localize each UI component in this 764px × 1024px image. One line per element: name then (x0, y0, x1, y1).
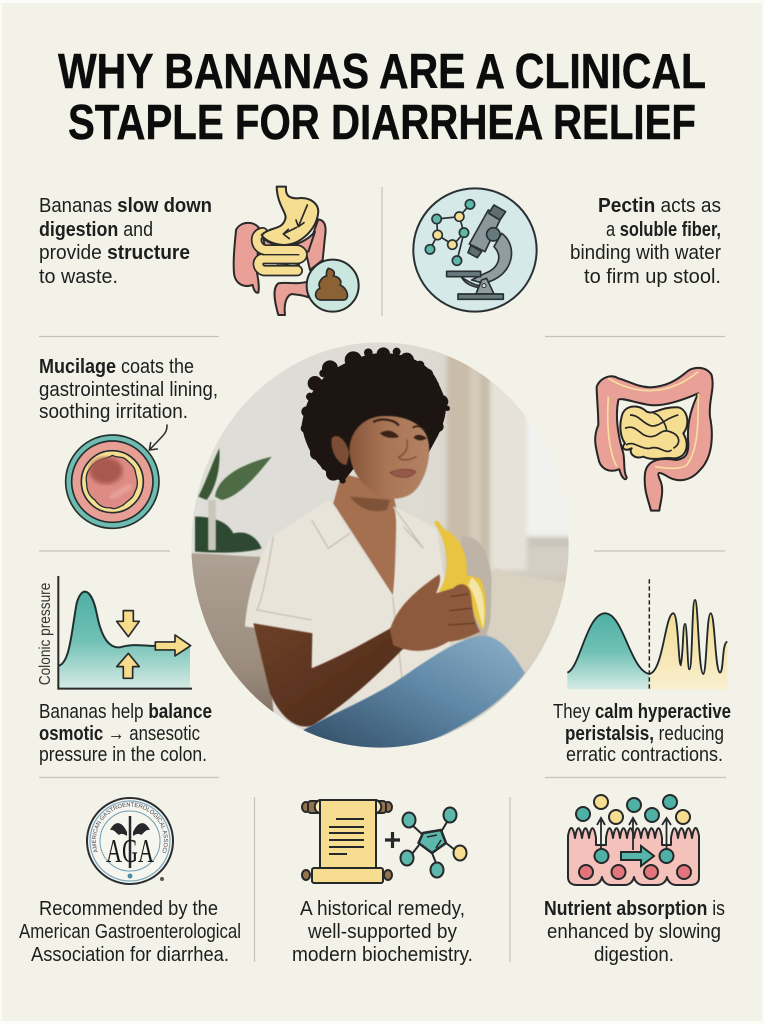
text: historical remedy: A historical remedy, (300, 897, 465, 920)
icon: intestinal cross-section (66, 425, 167, 528)
text: mucilage: soothing irritation. (39, 400, 188, 423)
facial features (374, 419, 426, 478)
icon: digestive tract with stool (234, 187, 359, 315)
text: nutrient absorption: enhanced by slowing (547, 920, 721, 943)
text: pectin: a soluble fiber, (606, 218, 721, 241)
banana (434, 521, 486, 630)
forearm (253, 623, 407, 727)
sofa (192, 537, 565, 712)
text: peristalsis: peristalsis, reducing (565, 722, 724, 745)
face (349, 416, 429, 499)
text: AGA recommendation: Association for diarrhea. (31, 943, 229, 966)
text: peristalsis: erratic contractions. (566, 743, 723, 766)
icon: AGA seal: AMERICAN GASTROENTEROLOGICAL ASSOCIATION (92, 802, 168, 854)
text: slow down digestion: provide structure (39, 241, 190, 264)
text: AGA recommendation: American Gastroenterological (19, 920, 241, 943)
hair (301, 347, 450, 484)
text: pectin (570, 194, 721, 288)
icon: nutrient absorption in villi (568, 795, 699, 885)
jeans (303, 636, 525, 753)
text: slow down digestion: digestion and (39, 218, 153, 241)
chart: colonic pressure (37, 576, 192, 689)
text: AGA recommendation: Recommended by the (39, 897, 218, 920)
text: mucilage (39, 355, 218, 423)
text: pectin: binding with water (570, 241, 721, 264)
neck and chest (333, 473, 397, 597)
icon: scroll plus molecule (302, 800, 466, 883)
text: peristalsis (553, 700, 731, 766)
icon: AGA seal (86, 797, 174, 885)
text: nutrient absorption: digestion. (594, 943, 674, 966)
chart: calm vs erratic peristalsis (567, 579, 727, 690)
text: historical remedy: modern biochemistry. (292, 943, 473, 966)
text: nutrient absorption: Nutrient absorption is (544, 897, 725, 920)
icon: large and small intestine (595, 368, 713, 511)
text: osmotic balance: Bananas help balance (39, 700, 212, 723)
icon: microscope and molecule (413, 188, 537, 312)
text: slow down digestion: Bananas slow down (39, 194, 212, 217)
hands (390, 574, 480, 651)
text: pectin: to firm up stool. (584, 265, 721, 288)
text: peristalsis: They calm hyperactive (553, 700, 731, 723)
title (58, 45, 706, 150)
shirt (245, 500, 450, 703)
text: slow down digestion (39, 194, 212, 288)
text: osmotic balance: osmotic → ansesotic (39, 722, 200, 745)
text: osmotic balance (39, 700, 212, 766)
text: nutrient absorption (544, 897, 725, 966)
text: mucilage: Mucilage coats the (39, 355, 194, 378)
photo background: room (190, 340, 580, 750)
chart: colonic pressure: Colonic pressure (37, 582, 54, 685)
text: historical remedy: well-supported by (307, 920, 458, 943)
icon: AGA seal: AGA (106, 833, 154, 870)
plant (195, 448, 272, 553)
text: mucilage: gastrointestinal lining, (39, 378, 218, 401)
text: pectin: Pectin acts as (598, 194, 721, 217)
text: slow down digestion: to waste. (39, 265, 118, 288)
text: AGA recommendation (19, 897, 241, 966)
photo: woman holding a banana on a sofa (190, 340, 580, 753)
text: historical remedy (292, 897, 473, 966)
text: osmotic balance: pressure in the colon. (39, 743, 207, 766)
